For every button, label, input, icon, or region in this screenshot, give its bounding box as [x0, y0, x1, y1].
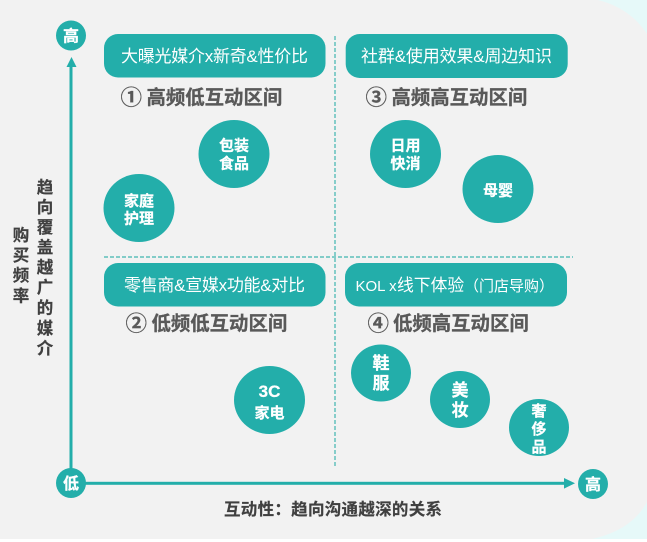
bubble: daily consumer goods — [370, 120, 441, 188]
quadrant 3 media pill: 社群&使用效果&周边知识 — [361, 46, 552, 66]
quadrant 1 media pill: 大曝光媒介x新奇&性价比 — [121, 47, 308, 66]
axis node: vertical high: 高 — [63, 26, 79, 46]
bubble: mother and baby: 母婴 — [483, 182, 513, 200]
bubble: beauty — [430, 371, 490, 428]
bubble: home care — [104, 174, 174, 242]
bubble: home care: 护理 — [124, 210, 154, 228]
quadrant 2 media pill: 零售商&宣媒x功能&对比 — [124, 276, 305, 295]
panel: quadrant 4 — [345, 263, 569, 456]
y axis label: media reach: 盖 — [37, 237, 53, 257]
bubble: beauty: 美 — [452, 380, 468, 400]
y axis label: media reach: 覆 — [37, 218, 53, 237]
bubble: shoes and clothing: 服 — [372, 374, 390, 393]
horizontal axis arrow — [84, 478, 575, 489]
bubble: packaged food: 包装 — [219, 136, 249, 154]
y axis label: media reach: 介 — [37, 339, 54, 358]
axis node: horizontal high — [578, 469, 608, 499]
quadrant 4 media pill: KOL x — [356, 278, 397, 295]
quadrant 2 heading: 低频低互动区间 — [152, 313, 287, 335]
bubble: home care: 家庭 — [124, 192, 154, 210]
axis node: vertical high — [56, 20, 86, 50]
bubble: packaged food — [198, 120, 270, 188]
y axis label: media reach: 趋 — [37, 178, 54, 197]
bubble: luxury: 品 — [531, 439, 547, 456]
bubble: daily consumer goods: 快消 — [390, 154, 421, 172]
quadrant 1 heading: ① — [120, 86, 142, 110]
quadrant 2 media pill — [104, 263, 326, 306]
y axis label: media reach: 的 — [37, 298, 53, 318]
quadrant 4 media pill: 线下体验 — [397, 276, 464, 295]
y axis label: purchase frequency: 买 — [13, 247, 29, 265]
y axis label: media reach: 越 — [37, 258, 54, 277]
quadrant 3 media pill — [346, 34, 568, 78]
y axis label: media reach: 媒 — [37, 319, 54, 338]
y axis label: purchase frequency: 购 — [13, 226, 29, 245]
quadrant 1 media pill — [104, 34, 326, 78]
panel: quadrant 1 — [104, 34, 326, 242]
quadrant 1 heading: 高频低互动区间 — [146, 86, 282, 109]
axis node: origin low — [56, 468, 86, 498]
quadrant 3 heading: ③ — [366, 86, 387, 110]
quadrant 3 heading: 高频高互动区间 — [392, 86, 527, 109]
quadrant 2 heading: ② — [126, 312, 147, 336]
bubble: 3C appliances: 3C — [259, 382, 280, 401]
bubble: packaged food: 食品 — [219, 154, 249, 172]
panel: quadrant 2 — [104, 263, 326, 434]
bubble: beauty: 妆 — [452, 400, 468, 420]
bubble: shoes and clothing: 鞋 — [372, 354, 390, 373]
bubble: mother and baby — [462, 155, 534, 223]
vertical axis arrow — [66, 57, 76, 470]
bubble: luxury — [509, 399, 569, 456]
axis node: origin low: 低 — [63, 475, 79, 493]
bubble: shoes and clothing — [351, 344, 411, 402]
bubble: luxury: 奢 — [531, 403, 547, 420]
quadrant 4 media pill: （门店导购） — [464, 278, 554, 295]
y axis label: purchase frequency: 率 — [13, 286, 29, 306]
x axis label: 互动性：趋向沟通越深的关系 — [224, 499, 442, 519]
quadrant 4 heading: 低频高互动区间 — [393, 312, 529, 335]
bubble: daily consumer goods: 日用 — [390, 138, 421, 154]
bubble: 3C appliances — [234, 366, 305, 434]
y axis label: media reach: 向 — [37, 198, 53, 217]
quadrant 4 media pill — [345, 263, 567, 306]
quadrant 4 heading: ④ — [368, 312, 389, 336]
y axis label: purchase frequency: 频 — [13, 266, 30, 285]
y axis label: media reach: 广 — [37, 278, 53, 297]
bubble: luxury: 侈 — [531, 421, 547, 438]
axis node: horizontal high: 高 — [585, 475, 601, 494]
panel: quadrant 3 — [346, 34, 568, 223]
bubble: 3C appliances: 家电 — [254, 404, 285, 422]
